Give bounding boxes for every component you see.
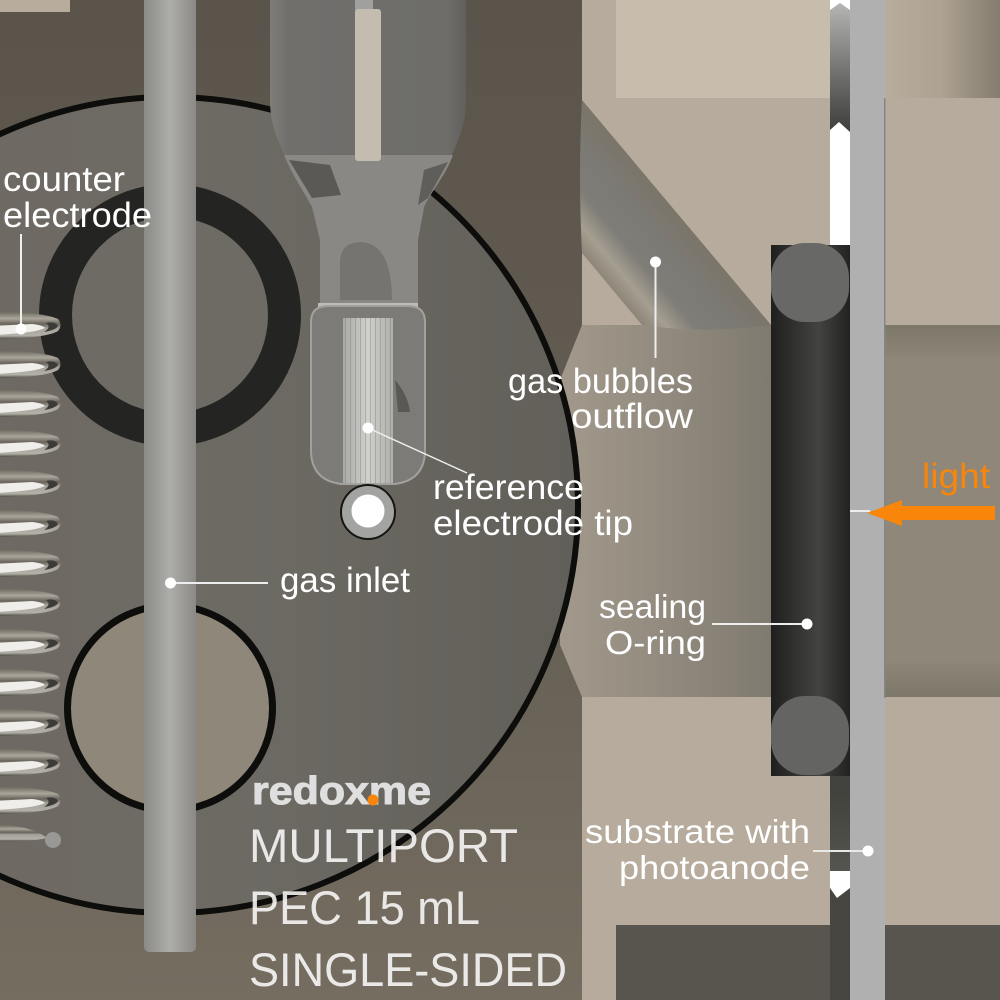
- label: substrate with photoanode: [585, 813, 874, 886]
- logo: redoxme: [252, 770, 431, 813]
- coil end dot: [45, 832, 61, 848]
- label: reference electrode tip: electrode tip: [433, 504, 633, 543]
- horizontal flow channel: [560, 325, 1000, 697]
- title: MULTIPORT: [249, 819, 518, 872]
- reference electrode glass body: [270, 0, 466, 484]
- large disc outline: [0, 97, 578, 913]
- label: substrate with photoanode: substrate with: [585, 813, 810, 850]
- gas inlet rod: [144, 0, 196, 952]
- title: PEC 15 mL: [249, 881, 480, 934]
- label: sealing O-ring: sealing: [599, 588, 706, 625]
- label: counter electrode: electrode: [3, 196, 152, 235]
- label: counter electrode: counter: [3, 160, 125, 199]
- label: counter electrode: [3, 160, 152, 334]
- label: substrate with photoanode: photoanode: [619, 849, 810, 886]
- top-left block fragment: [0, 0, 70, 12]
- right body, lower block: [582, 697, 1000, 925]
- label: gas bubbles outflow: [508, 256, 694, 436]
- label: gas bubbles outflow: outflow: [571, 397, 694, 436]
- gap with sealing section: [830, 0, 850, 1000]
- label: gas inlet: [165, 561, 410, 600]
- label: reference electrode tip: reference: [433, 468, 584, 507]
- label: sealing O-ring: O-ring: [605, 624, 706, 661]
- title: [249, 819, 567, 996]
- right body, top band: [582, 0, 1000, 98]
- upper port dark ring: [56, 200, 284, 430]
- sealing O-ring: [771, 243, 850, 776]
- left body background: [0, 0, 582, 1000]
- right body, upper block: [582, 98, 1000, 325]
- label: sealing O-ring: [599, 588, 812, 661]
- diagonal gas outflow channel: [580, 100, 771, 330]
- counter electrode coil: [0, 312, 60, 841]
- label: light with arrow: light: [922, 457, 990, 496]
- right body, bottom band: [582, 925, 1000, 1000]
- glass substrate with photoanode: [850, 0, 886, 1000]
- reference port: [341, 485, 395, 539]
- label: gas bubbles outflow: gas bubbles: [508, 362, 693, 401]
- label: reference electrode tip: [362, 422, 633, 543]
- title: SINGLE-SIDED: [249, 943, 567, 996]
- label: light with arrow: [850, 457, 995, 526]
- label: gas inlet: gas inlet: [280, 561, 410, 600]
- lower port: [68, 606, 272, 810]
